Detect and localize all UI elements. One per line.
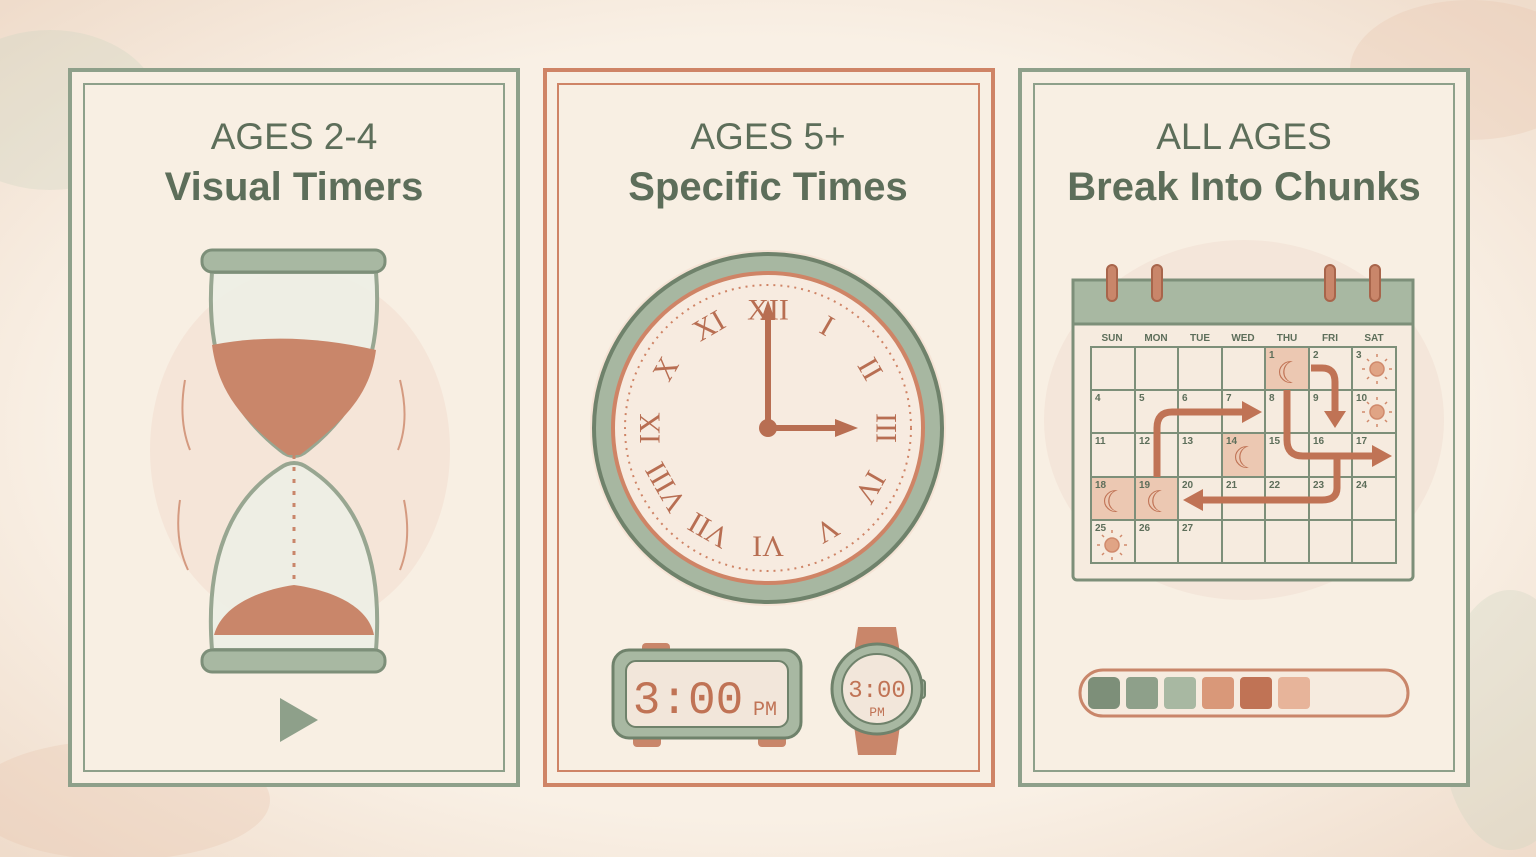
title: visual timers: Visual Timers bbox=[165, 165, 423, 209]
panel: ages 5+ bbox=[545, 70, 993, 785]
icon: calendar: 22 bbox=[1269, 480, 1281, 491]
icon: calendar: FRI bbox=[1322, 333, 1338, 344]
icon: calendar: 6 bbox=[1182, 393, 1188, 404]
icon: analog clock: XI bbox=[687, 304, 731, 348]
icon: play button bbox=[280, 698, 318, 742]
icon: calendar: SUN bbox=[1101, 333, 1123, 344]
heading: ages 5+: AGES 5+ bbox=[690, 116, 846, 157]
icon: calendar: WED bbox=[1231, 333, 1255, 344]
icon: calendar: 15 bbox=[1269, 436, 1281, 447]
icon: calendar: 19 bbox=[1139, 480, 1151, 491]
icon: calendar: 10 bbox=[1356, 393, 1368, 404]
icon: analog clock: VIII bbox=[639, 456, 693, 518]
icon: calendar: ☾ bbox=[1146, 485, 1172, 520]
icon: analog clock: VI bbox=[752, 530, 784, 562]
icon: calendar: 1 bbox=[1269, 350, 1275, 361]
icon: analog clock: IX bbox=[634, 412, 666, 444]
icon: calendar: 11 bbox=[1095, 436, 1106, 447]
icon: calendar: 25 bbox=[1095, 523, 1107, 534]
title: specific times: Specific Times bbox=[628, 165, 908, 209]
icon: analog clock: IV bbox=[848, 465, 892, 509]
icon: calendar: THU bbox=[1277, 333, 1297, 344]
icon: analog clock: X bbox=[646, 351, 686, 387]
icon: calendar: 8 bbox=[1269, 393, 1275, 404]
icon: hourglass bbox=[150, 250, 450, 672]
progress bar bbox=[1080, 670, 1408, 716]
icon: calendar: 24 bbox=[1356, 480, 1368, 491]
icon: digital alarm clock: 3:00 bbox=[633, 675, 743, 727]
icon: calendar bbox=[1044, 240, 1444, 600]
icon: analog clock: V bbox=[809, 510, 845, 550]
icon: calendar: 18 bbox=[1095, 480, 1107, 491]
icon: calendar: 21 bbox=[1226, 480, 1238, 491]
icon: calendar: 17 bbox=[1356, 436, 1368, 447]
icon: calendar: 13 bbox=[1182, 436, 1194, 447]
icon: calendar: 12 bbox=[1139, 436, 1151, 447]
icon: analog clock: II bbox=[851, 352, 889, 386]
icon: calendar: 4 bbox=[1095, 393, 1101, 404]
icon: calendar: 20 bbox=[1182, 480, 1194, 491]
heading: ages 2-4: AGES 2-4 bbox=[211, 116, 377, 157]
icon: analog clock: I bbox=[814, 309, 840, 343]
icon: analog clock bbox=[590, 250, 946, 606]
icon: calendar: 7 bbox=[1226, 393, 1232, 404]
icon: analog clock: XII bbox=[747, 294, 789, 326]
icon: wristwatch: PM bbox=[869, 705, 885, 720]
heading: all ages: ALL AGES bbox=[1156, 116, 1332, 157]
panel: ages 2-4 bbox=[70, 70, 518, 785]
icon: analog clock: III bbox=[870, 413, 902, 443]
icon: calendar: MON bbox=[1144, 333, 1168, 344]
icon: calendar: 3 bbox=[1356, 350, 1362, 361]
icon: calendar: ☾ bbox=[1233, 441, 1259, 476]
icon: calendar: 23 bbox=[1313, 480, 1325, 491]
icon: calendar: ☾ bbox=[1277, 356, 1303, 391]
icon: calendar: 2 bbox=[1313, 350, 1319, 361]
icon: wristwatch: 3:00 bbox=[848, 678, 906, 705]
icon: calendar: 16 bbox=[1313, 436, 1325, 447]
icon: calendar: 26 bbox=[1139, 523, 1151, 534]
icon: analog clock: VII bbox=[683, 505, 735, 555]
title: break into chunks: Break Into Chunks bbox=[1067, 165, 1421, 209]
icon: digital alarm clock bbox=[613, 643, 801, 747]
icon: calendar: 9 bbox=[1313, 393, 1319, 404]
icon: wristwatch bbox=[832, 627, 925, 755]
panel: all ages bbox=[1020, 70, 1468, 785]
icon: calendar: 14 bbox=[1226, 436, 1238, 447]
icon: calendar: ☾ bbox=[1102, 485, 1128, 520]
icon: calendar: SAT bbox=[1364, 333, 1384, 344]
icon: calendar: 27 bbox=[1182, 523, 1194, 534]
icon: calendar: 5 bbox=[1139, 393, 1145, 404]
icon: calendar: TUE bbox=[1190, 333, 1210, 344]
icon: digital alarm clock: PM bbox=[753, 699, 777, 722]
